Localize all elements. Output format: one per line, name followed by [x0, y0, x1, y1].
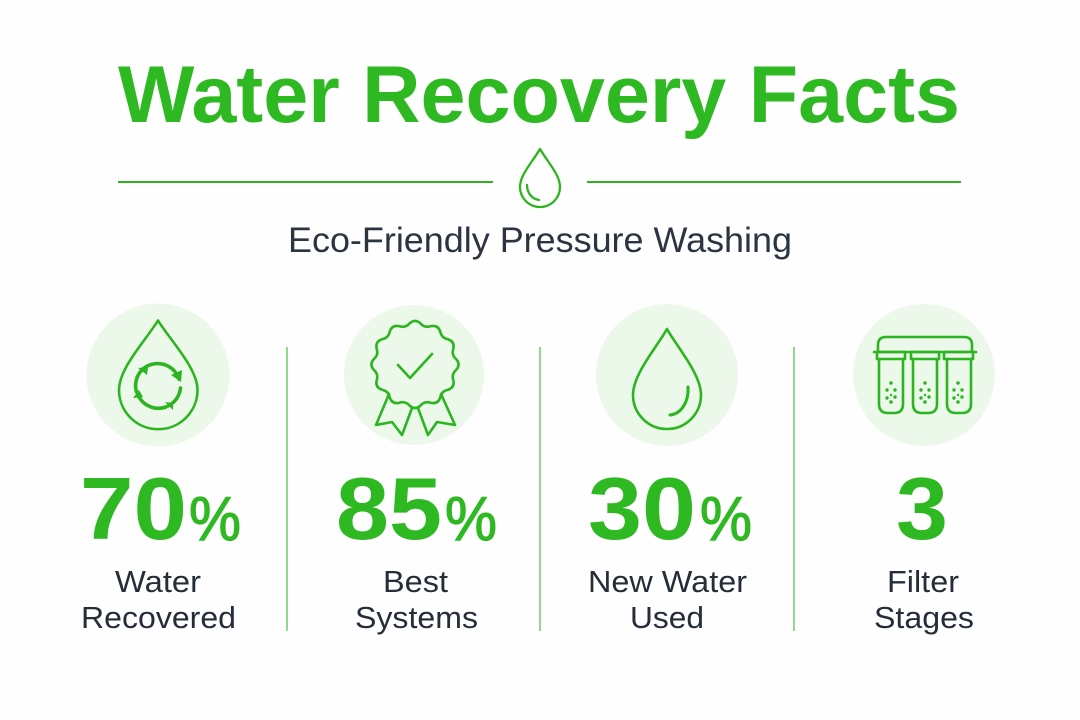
icon: drop with recycling arrows — [86, 304, 230, 446]
icon: three-stage filter — [853, 304, 995, 446]
panel: new water used — [588, 304, 752, 635]
label: water recovered: Recovered — [81, 600, 236, 635]
label: new water used: Used — [630, 600, 704, 635]
title divider with drop icon — [118, 149, 961, 207]
stat: 3: 3 — [896, 459, 948, 558]
stat: 85%: 85 — [336, 459, 442, 558]
label: filter stages — [874, 564, 974, 635]
stat: 30%: 30 — [588, 459, 696, 558]
icon: award badge — [344, 305, 484, 445]
label: filter stages: Stages — [874, 600, 974, 635]
stat: 30% — [588, 459, 752, 558]
stat: 70%: 70 — [80, 459, 187, 558]
label: best systems — [355, 564, 478, 635]
subtitle: Eco-Friendly Pressure Washing — [288, 221, 792, 260]
label: water recovered — [81, 564, 236, 635]
panel: filter stages — [853, 304, 995, 635]
title: Water Recovery Facts — [118, 50, 960, 140]
stat: 85% — [336, 459, 497, 558]
label: water recovered: Water — [115, 564, 201, 599]
stat: 85%: % — [445, 485, 497, 554]
label: new water used: New Water — [588, 564, 747, 599]
stat: 70%: % — [189, 485, 241, 554]
panel: best systems — [336, 305, 497, 635]
icon: water drop — [596, 304, 738, 446]
label: best systems: Best — [383, 564, 448, 599]
label: filter stages: Filter — [887, 564, 959, 599]
panel: water recovered — [80, 304, 241, 635]
stat: 70% — [80, 459, 241, 558]
label: new water used — [588, 564, 747, 635]
label: best systems: Systems — [355, 600, 478, 635]
stat: 30%: % — [700, 485, 752, 554]
